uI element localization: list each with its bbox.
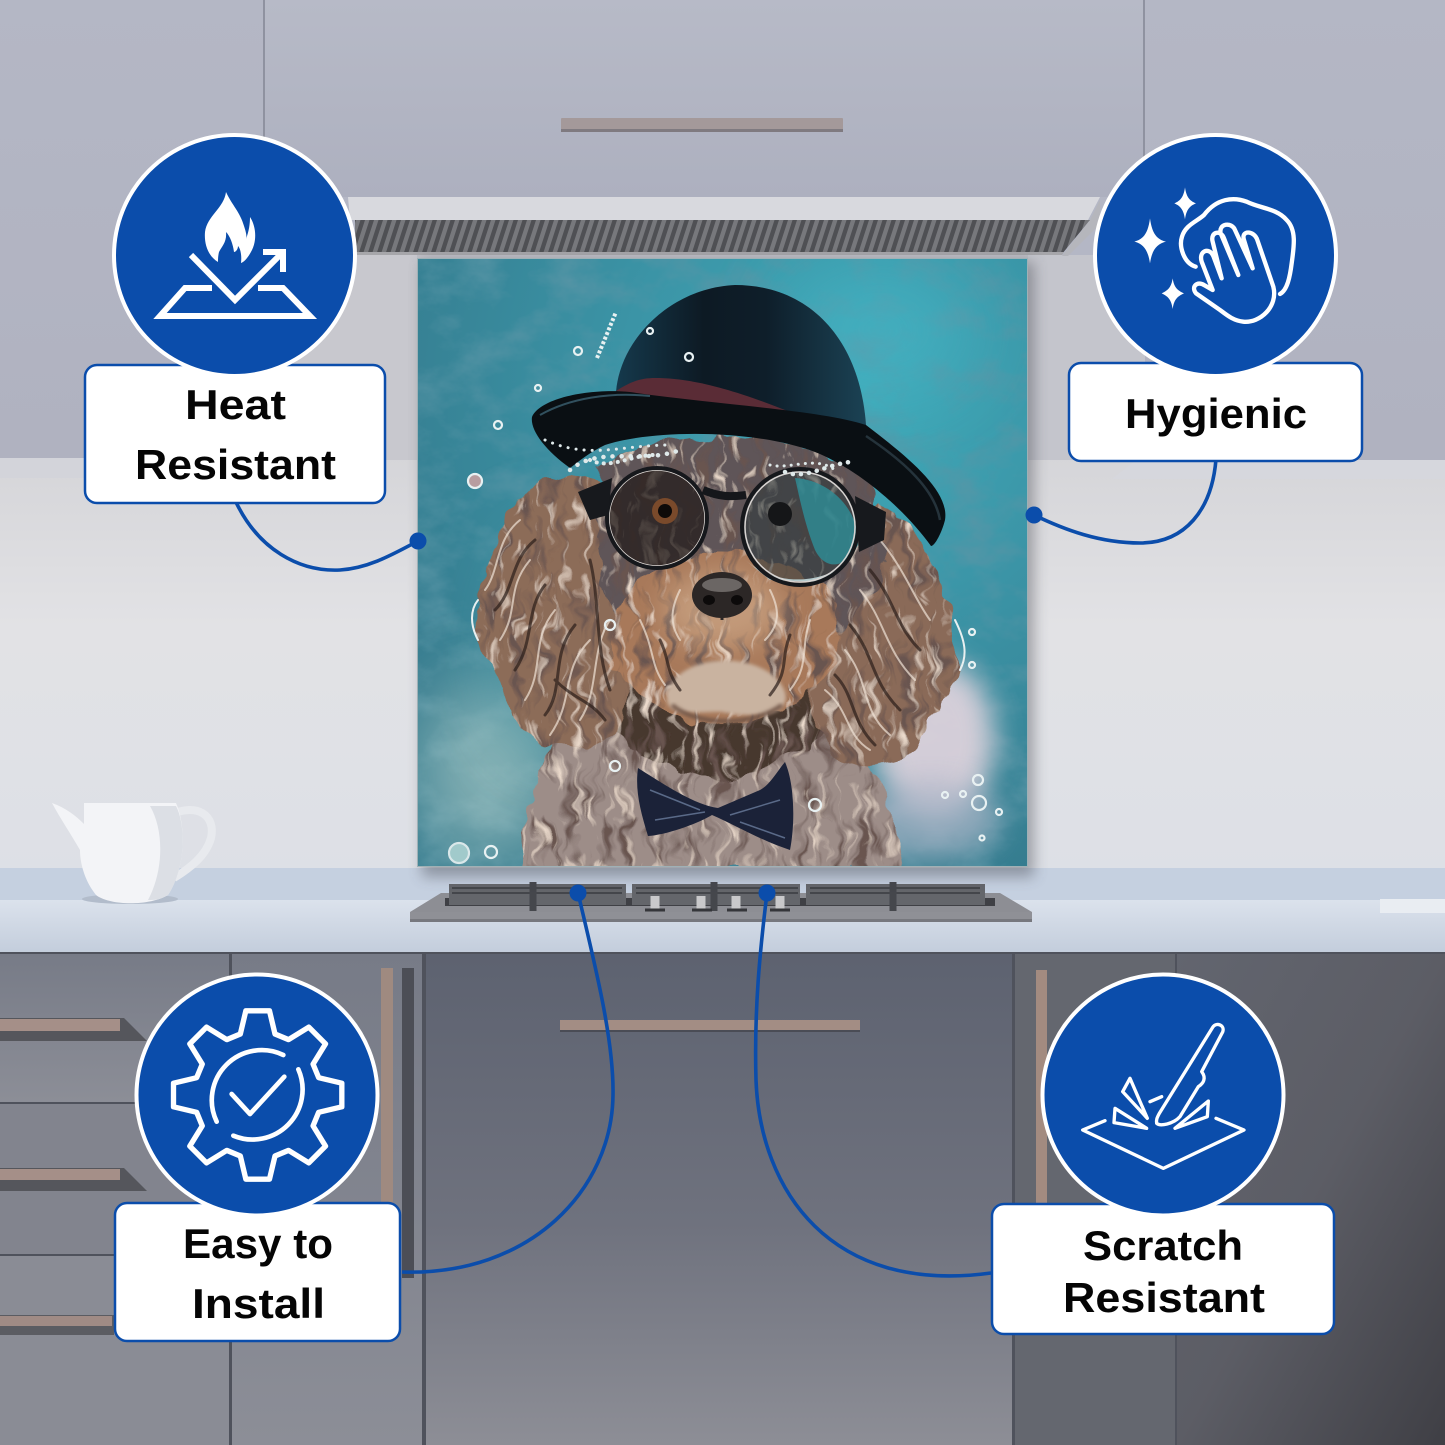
- icon circle: [1095, 135, 1336, 376]
- label text: Resistant: [1063, 1274, 1265, 1321]
- icon: knife scratching a surface: [1083, 1024, 1244, 1168]
- chin: [667, 660, 786, 715]
- bowler hat: [532, 285, 945, 546]
- label text: [1063, 1222, 1265, 1321]
- label text: [135, 381, 336, 488]
- label box: [1069, 363, 1362, 461]
- lower cabinets: [0, 952, 1445, 1445]
- icon circle: [1042, 974, 1284, 1216]
- label box: [992, 1204, 1334, 1334]
- right ear: [810, 503, 962, 764]
- icon: gear with check mark: [173, 1011, 342, 1179]
- callout: heat resistant: [85, 135, 385, 503]
- icon circle: [136, 974, 378, 1216]
- water bubbles: [449, 312, 1002, 863]
- wall behind the hob: [0, 255, 1445, 875]
- head top fur: [598, 437, 885, 650]
- teapot: [52, 803, 212, 904]
- connector: hygienic: [1026, 459, 1216, 543]
- gas hob: [410, 882, 1032, 922]
- icon: hand wiping with sparkles: [1134, 187, 1294, 322]
- label box: [85, 365, 385, 503]
- extractor hood: [348, 197, 1100, 256]
- label text: Hygienic: [1125, 390, 1307, 437]
- label text: Heat: [185, 381, 286, 428]
- upper cabinets: [0, 0, 1445, 479]
- callout: easy to install: [115, 974, 400, 1341]
- muzzle: [610, 552, 842, 724]
- nose: [692, 572, 752, 620]
- icon: flame with deflecting arrow: [160, 192, 310, 316]
- worktop: [0, 868, 1445, 953]
- dog illustration: [449, 285, 1002, 872]
- label text: [183, 1220, 333, 1327]
- left ear: [475, 475, 631, 747]
- eyes and glasses: [578, 468, 886, 585]
- label text: Resistant: [135, 441, 336, 488]
- glass reflection strip: [417, 258, 1028, 867]
- callout: scratch resistant: [992, 974, 1334, 1334]
- label text: Install: [192, 1280, 325, 1327]
- callout: hygienic: [1069, 135, 1362, 461]
- droplets on hat brim: [545, 440, 850, 474]
- upper cabinet handle: [561, 118, 843, 132]
- label box: [115, 1203, 400, 1341]
- glass splashback art panel: [417, 258, 1034, 877]
- bow tie: [637, 762, 793, 850]
- cabinet handles: [0, 968, 1047, 1335]
- connector: easy to install: [402, 884, 613, 1272]
- fur strands: [472, 520, 965, 750]
- body fur: [518, 690, 905, 872]
- connector: heat resistant: [235, 500, 426, 570]
- label text: Scratch: [1083, 1222, 1243, 1269]
- label text: Easy to: [183, 1220, 333, 1267]
- dark neck fur: [600, 670, 845, 776]
- icon circle: [114, 135, 355, 376]
- connector: scratch resistant: [756, 884, 991, 1276]
